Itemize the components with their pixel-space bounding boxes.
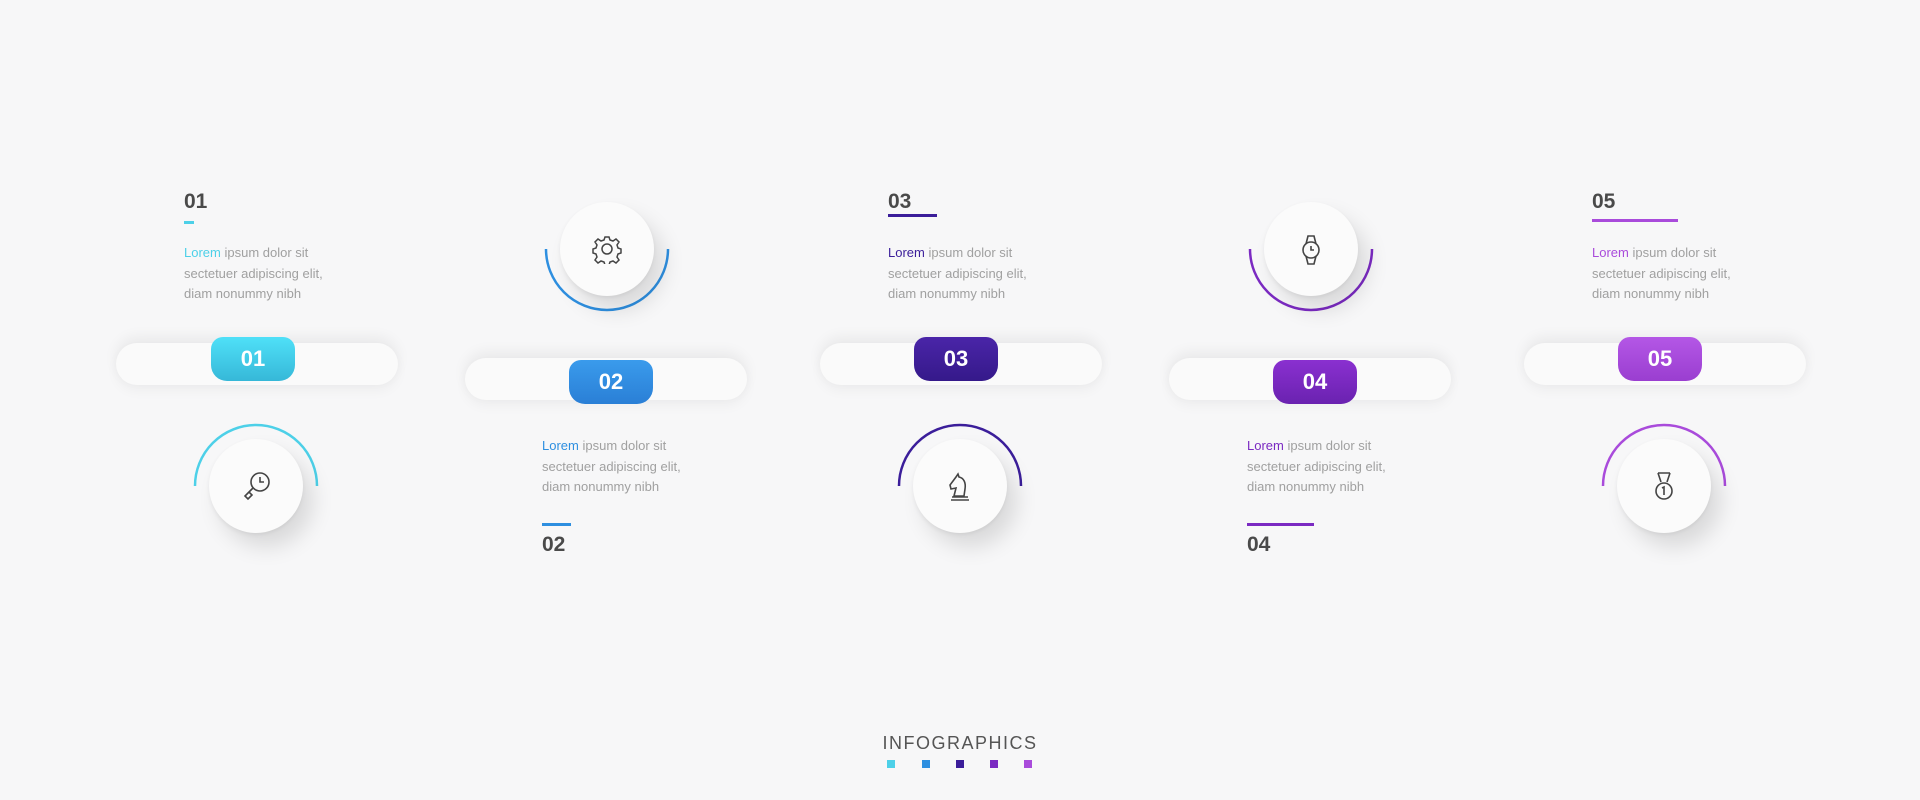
step 2 label: diam nonummy nibh [542,479,659,494]
step 2 label: Lorem ipsum dolor sit [542,438,666,453]
step 1 label: diam nonummy nibh [184,286,301,301]
step 1 label: Lorem ipsum dolor sit [184,245,308,260]
bar 3 [820,343,1102,385]
badge 02: 02 [599,369,623,394]
bar 2 [465,358,747,400]
badge 01: 01 [241,346,265,371]
step 1 label [184,190,323,301]
step 2 label: sectetuer adipiscing elit, [542,458,681,474]
step 3 label: 03 [888,190,911,213]
step 3 label: diam nonummy nibh [888,286,1005,301]
badge 04: 04 [1303,369,1327,394]
step 5 label: Lorem ipsum dolor sit [1592,245,1716,260]
bar 4 [1169,358,1451,400]
icon circle 3: chess knight [898,424,1022,552]
step 5 label: 05 [1592,190,1615,213]
badge 03 [914,337,998,381]
step 4 label: diam nonummy nibh [1247,479,1364,494]
step 1 label: sectetuer adipiscing elit, [184,266,323,280]
icon circle 1: search clock [194,424,318,552]
badge 02 [569,360,653,404]
badge 01 [211,337,295,381]
icon circle 4: watch [1248,214,1374,315]
footer title [882,733,1038,768]
step 2 label: 02 [542,533,565,556]
step 5 label [1592,190,1731,301]
step 4 label: 04 [1247,533,1270,556]
badge 04 [1273,360,1357,404]
step 3 label: sectetuer adipiscing elit, [888,266,1027,280]
icon circle 2: gear [544,214,670,315]
bar 5 [1524,343,1806,385]
step 5 label: sectetuer adipiscing elit, [1592,266,1731,280]
step 3 label [888,190,1027,301]
step 4 label [1247,438,1386,556]
bar 1 [116,343,398,385]
badge 05 [1618,337,1702,381]
step 1 label: 01 [184,190,207,213]
step 4 label: Lorem ipsum dolor sit [1247,438,1371,453]
step 4 label: sectetuer adipiscing elit, [1247,458,1386,474]
icon circle 5: medal [1602,424,1726,552]
badge 03: 03 [944,346,968,371]
badge 05: 05 [1648,346,1672,371]
step 5 label: diam nonummy nibh [1592,286,1709,301]
step 2 label [542,438,681,556]
footer title: INFOGRAPHICS [882,733,1038,753]
step 3 label: Lorem ipsum dolor sit [888,245,1012,260]
